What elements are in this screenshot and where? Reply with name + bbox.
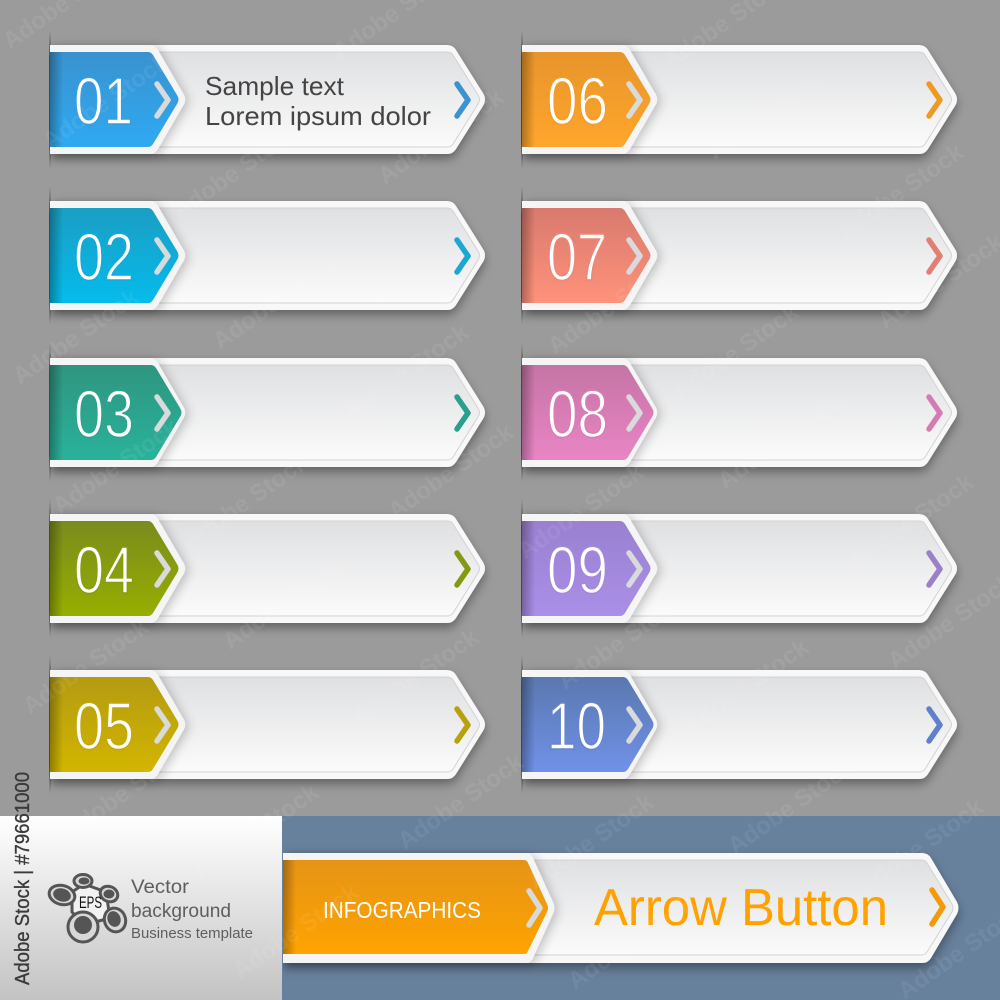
- number 02: 02: [74, 220, 134, 295]
- tab chevron: [629, 397, 640, 429]
- tab chevron: [157, 84, 168, 116]
- sample text: [205, 71, 431, 131]
- watermark: Adobe Stock: [228, 878, 364, 985]
- button 07: [521, 186, 957, 325]
- watermark: Adobe Stock: [553, 588, 689, 695]
- watermark: Adobe Stock: [48, 413, 184, 520]
- watermark: Adobe Stock: [373, 83, 509, 190]
- tab chevron: [529, 891, 540, 925]
- sample text: Lorem ipsum dolor: [205, 101, 431, 131]
- watermark: Adobe Stock: [523, 788, 659, 895]
- number 05: 05: [74, 689, 134, 764]
- number 01: 01: [74, 64, 133, 139]
- watermark: Adobe Stock: [563, 888, 699, 995]
- watermark: Adobe Stock: [338, 318, 474, 425]
- button 03: [49, 343, 485, 482]
- watermark: Adobe Stock: [678, 633, 814, 740]
- tab chevron: [157, 240, 168, 272]
- number 09: 09: [547, 533, 608, 608]
- end chevron: [929, 553, 940, 585]
- end chevron: [932, 890, 943, 924]
- tab 05: [50, 677, 178, 772]
- tab chevron: [629, 84, 640, 116]
- tab chevron: [157, 397, 168, 429]
- watermark: Adobe Stock: [168, 118, 304, 225]
- end chevron: [929, 240, 940, 272]
- watermark: Adobe Stock: [843, 468, 979, 575]
- button 01: [49, 30, 485, 169]
- watermark: Adobe Stock: [218, 548, 354, 655]
- watermark: Adobe Stock: [833, 138, 969, 245]
- button 09: [521, 499, 957, 638]
- tab 07: [522, 208, 650, 303]
- number 06: 06: [547, 64, 608, 139]
- number 03: 03: [74, 377, 134, 452]
- watermark: Adobe Stock: [38, 48, 174, 155]
- end chevron: [929, 84, 940, 116]
- vector text: [131, 877, 253, 942]
- title: Arrow Button: Arrow Button: [594, 879, 888, 937]
- button 10: [521, 655, 957, 794]
- button 06: [521, 30, 957, 169]
- sample text: Sample text: [205, 71, 345, 101]
- infographics label: INFOGRAPHICS: [323, 897, 481, 923]
- side credit: Adobe Stock | #79661000: [12, 772, 34, 985]
- logo icon: EPS: EPS: [79, 893, 102, 912]
- end chevron: [929, 397, 940, 429]
- tab chevron: [629, 709, 640, 741]
- tab 06: [522, 52, 650, 147]
- tab chevron: [157, 709, 168, 741]
- watermark: Adobe Stock: [543, 253, 679, 360]
- tab chevron: [629, 553, 640, 585]
- button 08: [521, 343, 957, 482]
- watermark: Adobe Stock: [383, 418, 519, 525]
- watermark: Adobe Stock: [58, 738, 194, 845]
- vector text: Vector: [131, 877, 190, 898]
- number 10: 10: [547, 689, 606, 764]
- watermark: Adobe Stock: [668, 298, 804, 405]
- watermark: Adobe Stock: [18, 613, 154, 720]
- tab 10: [522, 677, 654, 772]
- watermark: Adobe Stock: [703, 58, 839, 165]
- logo icon: EPS: [47, 874, 129, 942]
- tab 03: [50, 365, 182, 460]
- bottom blue band: [282, 816, 1000, 1000]
- button 05: [49, 655, 485, 794]
- watermark: Adobe Stock: [348, 623, 484, 730]
- end chevron: [457, 84, 468, 116]
- tab 04: [50, 521, 178, 616]
- watermark: Adobe Stock: [513, 458, 649, 565]
- tab 08: [522, 365, 654, 460]
- button 02: [49, 186, 485, 325]
- number 07: 07: [547, 220, 607, 295]
- end chevron: [457, 709, 468, 741]
- watermark: Adobe Stock: [178, 448, 314, 555]
- watermark: Adobe Stock: [8, 283, 144, 390]
- watermark: Adobe Stock: [188, 778, 324, 885]
- vector text: background: [131, 901, 231, 922]
- watermark: Adobe Stock: [853, 793, 989, 900]
- number 04: 04: [74, 533, 134, 608]
- bottom white panel: [0, 816, 282, 1000]
- watermark: Adobe Stock: [393, 748, 529, 855]
- bottom arrow button: [283, 853, 958, 963]
- end chevron: [457, 240, 468, 272]
- end chevron: [457, 553, 468, 585]
- tab chevron: [157, 553, 168, 585]
- tab 09: [522, 521, 650, 616]
- tab chevron: [629, 240, 640, 272]
- end chevron: [457, 397, 468, 429]
- tab 01: [50, 52, 178, 147]
- tab 02: [50, 208, 178, 303]
- watermark: Adobe Stock: [713, 388, 849, 495]
- button 04: [49, 499, 485, 638]
- watermark: Adobe Stock: [208, 248, 344, 355]
- end chevron: [929, 709, 940, 741]
- vector text: Business template: [131, 925, 253, 942]
- orange tab: [283, 860, 548, 954]
- watermark: Adobe Stock: [723, 753, 859, 860]
- number 08: 08: [547, 377, 608, 452]
